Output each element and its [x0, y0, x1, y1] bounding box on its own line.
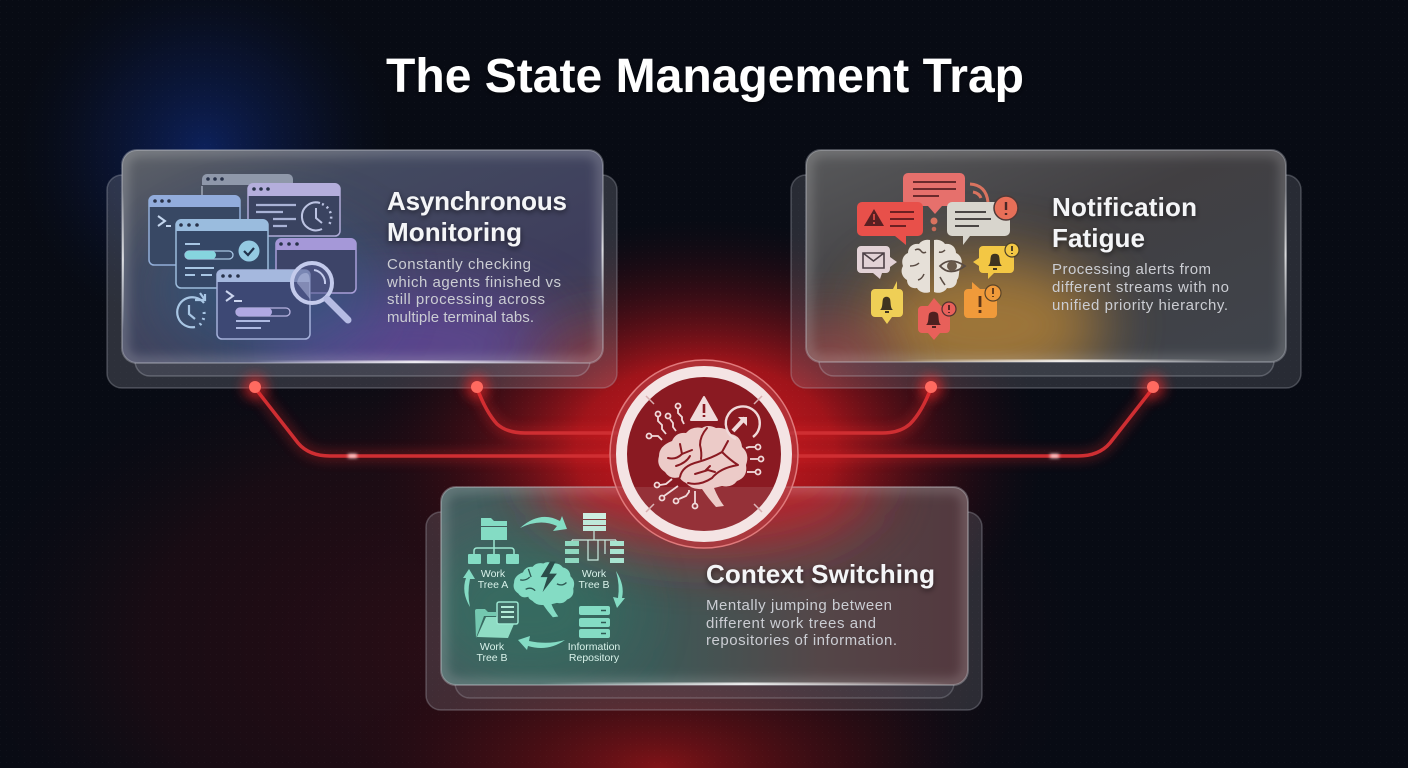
icon: central brain [658, 426, 747, 507]
label: Work Tree B upper: Work [582, 568, 607, 580]
text: notification fatigue body: Processing alerts from [1052, 261, 1211, 278]
panel: context switching [425, 486, 983, 711]
text: notification fatigue body: unified priority hierarchy. [1052, 297, 1228, 314]
text: context switching body: Mentally jumping between [706, 597, 892, 614]
heading: asynchronous monitoring: Asynchronous [387, 186, 567, 216]
icon: magnifier [292, 263, 348, 320]
icon: terminal windows with magnifier [149, 174, 356, 339]
panel: asynchronous monitoring [106, 149, 618, 389]
bubble: mail [857, 246, 897, 279]
bubble: red bell [918, 298, 956, 340]
arrow: B to A [463, 569, 475, 607]
connector: right outer [790, 388, 1153, 456]
heading: notification fatigue: Notification [1052, 192, 1197, 222]
label: Work Tree B lower: Work [480, 641, 505, 653]
label: Information Repository: Information [568, 641, 620, 653]
icon: brain with eye [902, 240, 965, 293]
icon: open folder with document [475, 602, 518, 638]
panel: notification fatigue [770, 150, 1301, 400]
bubble: yellow bell left [871, 281, 903, 324]
icon: gauge arrow [726, 406, 760, 439]
window: front terminal [217, 270, 310, 339]
heading: asynchronous monitoring: Monitoring [387, 217, 522, 247]
arrow: repository to B [518, 636, 565, 650]
text: asynchronous monitoring body: multiple terminal tabs. [387, 309, 534, 326]
text: asynchronous monitoring body: still processing across [387, 291, 545, 308]
icon: server stack [579, 606, 610, 638]
central hub [610, 360, 798, 548]
label: Work Tree B lower: Tree B [476, 652, 508, 664]
icon: server tree B [565, 513, 624, 563]
icon: circuit traces [646, 404, 764, 508]
heading: context switching: Context Switching [706, 559, 935, 589]
connector nodes [243, 375, 1165, 399]
bubble: grey with alert [947, 196, 1018, 245]
text: asynchronous monitoring body: Constantly checking [387, 256, 531, 273]
text: notification fatigue body: different streams with no [1052, 279, 1229, 296]
window: left terminal [149, 195, 240, 265]
icon: work tree cycle around brain [463, 513, 625, 664]
bubble: orange alert [964, 282, 1001, 318]
connector: right inner [790, 388, 931, 433]
icon: warning triangle [691, 397, 717, 420]
text: context switching body: repositories of information. [706, 632, 897, 649]
label: Work Tree B upper: Tree B [578, 579, 610, 591]
text: context switching body: different work trees and [706, 615, 876, 632]
label: Information Repository: Repository [569, 652, 620, 664]
window: top right with clock [248, 183, 340, 236]
heading: notification fatigue: Fatigue [1052, 223, 1145, 253]
connector: left outer [255, 388, 620, 456]
icon: notification bubbles around brain [857, 173, 1019, 340]
title: The State Management Trap [386, 50, 1024, 103]
label: Work Tree A: Tree A [478, 579, 508, 591]
arrow: B to repository [613, 571, 625, 608]
label: Work Tree A: Work [481, 568, 506, 580]
icon: signal arcs [970, 184, 988, 202]
window: progress and check [176, 219, 268, 288]
connector: left inner [477, 388, 620, 433]
window: right [276, 238, 356, 293]
connector lines [255, 388, 1153, 458]
icon: brain with lightning [514, 561, 574, 617]
bubble: top message [903, 173, 965, 214]
bubble: warning [857, 202, 923, 245]
window: back [202, 174, 293, 196]
bubble: yellow bell right [973, 243, 1019, 279]
icon: folder tree A [468, 518, 519, 564]
icon: history clock [177, 293, 205, 327]
text: asynchronous monitoring body: which agents finished vs [386, 274, 561, 291]
arrow: A to B [520, 516, 567, 531]
